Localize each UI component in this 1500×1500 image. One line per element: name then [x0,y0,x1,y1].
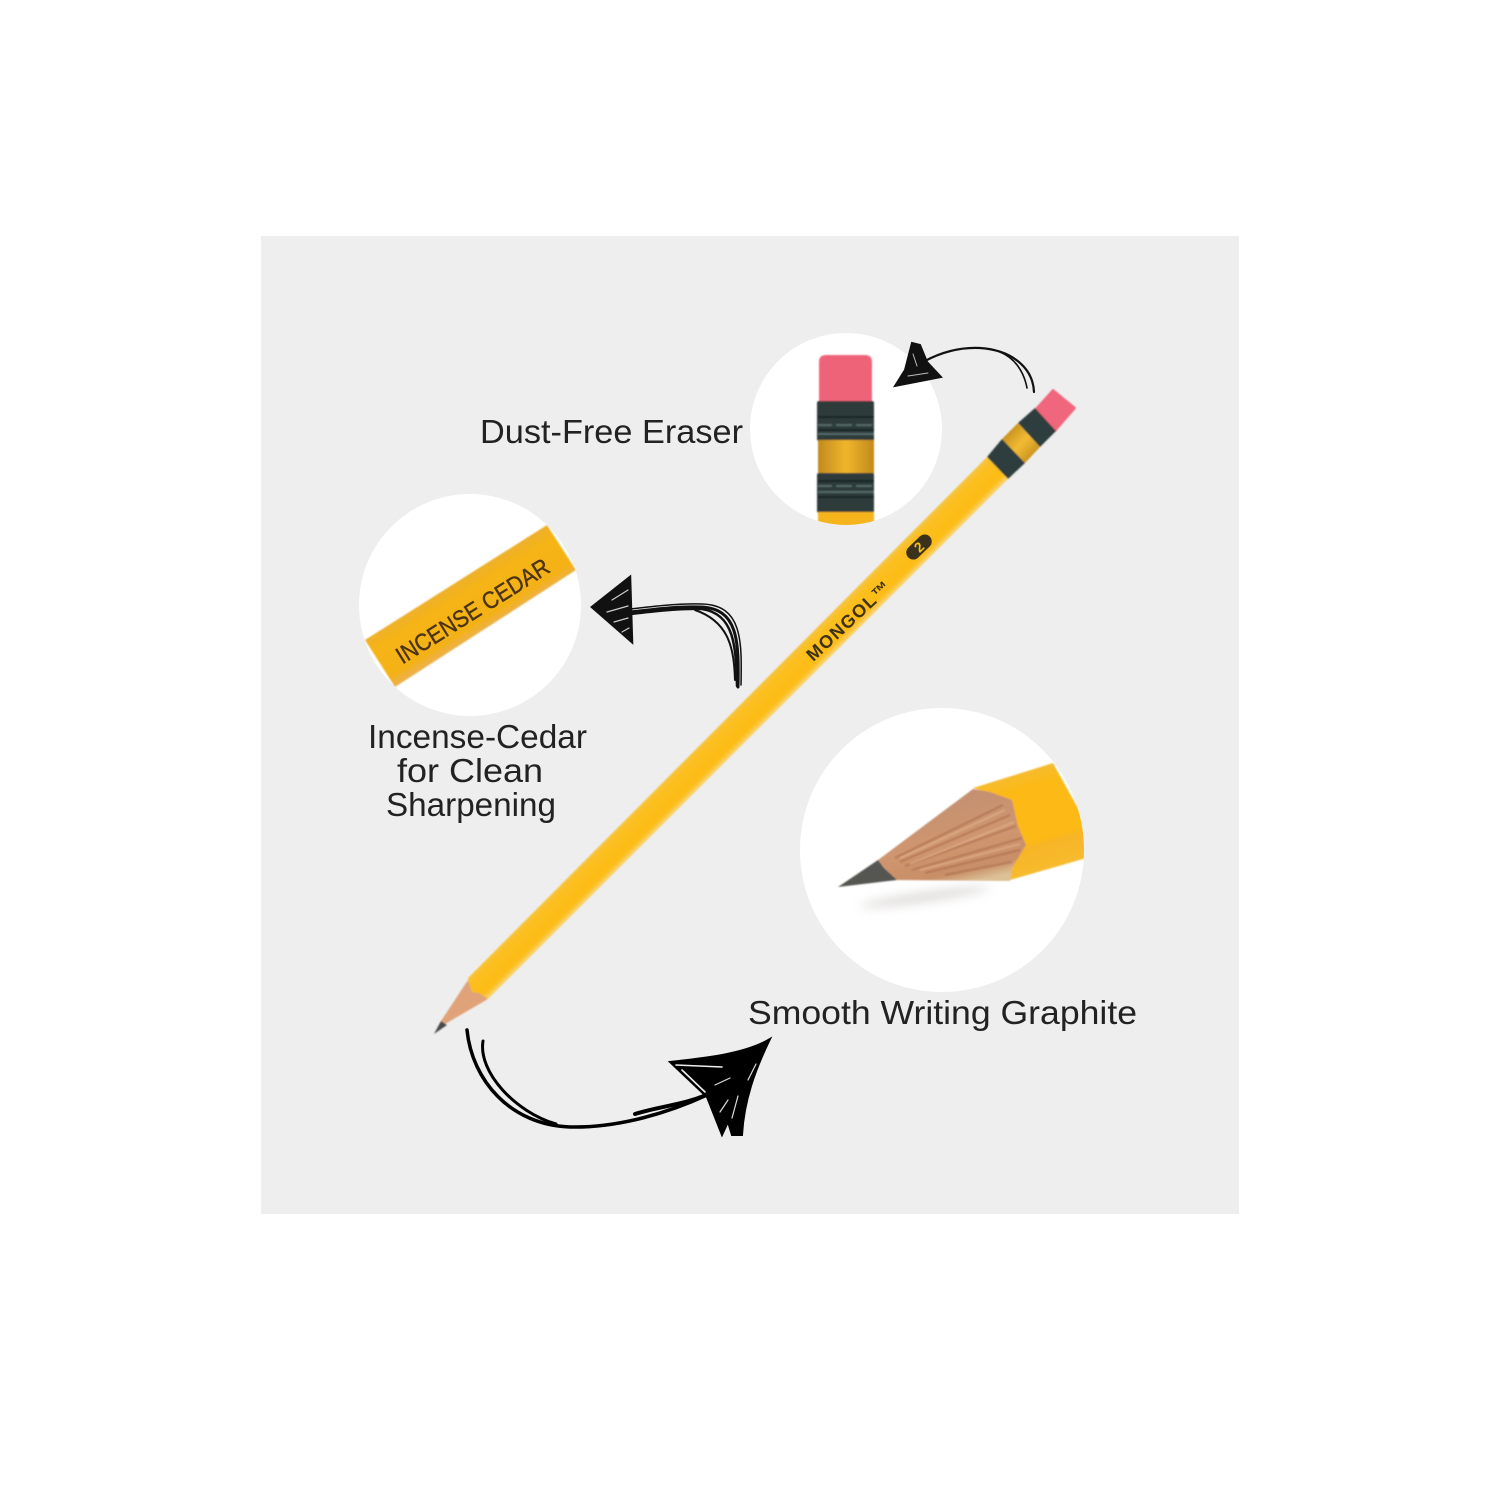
yellow hexagonal barrel [973,763,1090,880]
arrow: to graphite [467,1030,770,1135]
pencil body [468,457,1008,999]
pencil graphite point [434,1021,447,1034]
panel: eraser callout circle [750,333,942,528]
brand text: MONGOL™ [802,576,896,665]
label: cedar [368,718,587,823]
pencil wood tip [441,980,488,1024]
arrow: to cedar [592,577,741,687]
upper dark band [817,401,874,441]
lower dark band [817,473,874,513]
band ridges [818,425,874,492]
wood grain [895,805,1022,875]
arrow: to eraser [895,343,1034,392]
label: eraser: Dust-Free Eraser [480,413,743,450]
label: cedar: Incense-Cedar [368,718,587,755]
label: graphite: Smooth Writing Graphite [748,994,1137,1031]
pencil eraser [1035,390,1075,431]
eraser closeup [819,355,872,402]
grade badge: 2 [911,538,928,555]
grade badge [903,531,935,563]
background panel [261,236,1239,1214]
pencil upper ferrule band [1018,408,1056,447]
yellow body closeup [818,512,874,528]
pencil gold ferrule [1002,423,1040,463]
gold band closeup [818,440,874,474]
panel: cedar callout circle [359,494,581,716]
label: cedar: Sharpening [386,786,556,823]
imprint text: INCENSE CEDAR [391,554,555,670]
imprinted pencil closeup [365,525,576,687]
panel: graphite tip circle [800,708,1090,992]
graphite tip [838,860,897,887]
main pencil [434,390,1075,1034]
pencil lower ferrule band [987,439,1025,479]
tip shadow [864,884,986,910]
sharpened wood cone [878,789,1026,881]
label: cedar: for Clean [397,752,543,789]
